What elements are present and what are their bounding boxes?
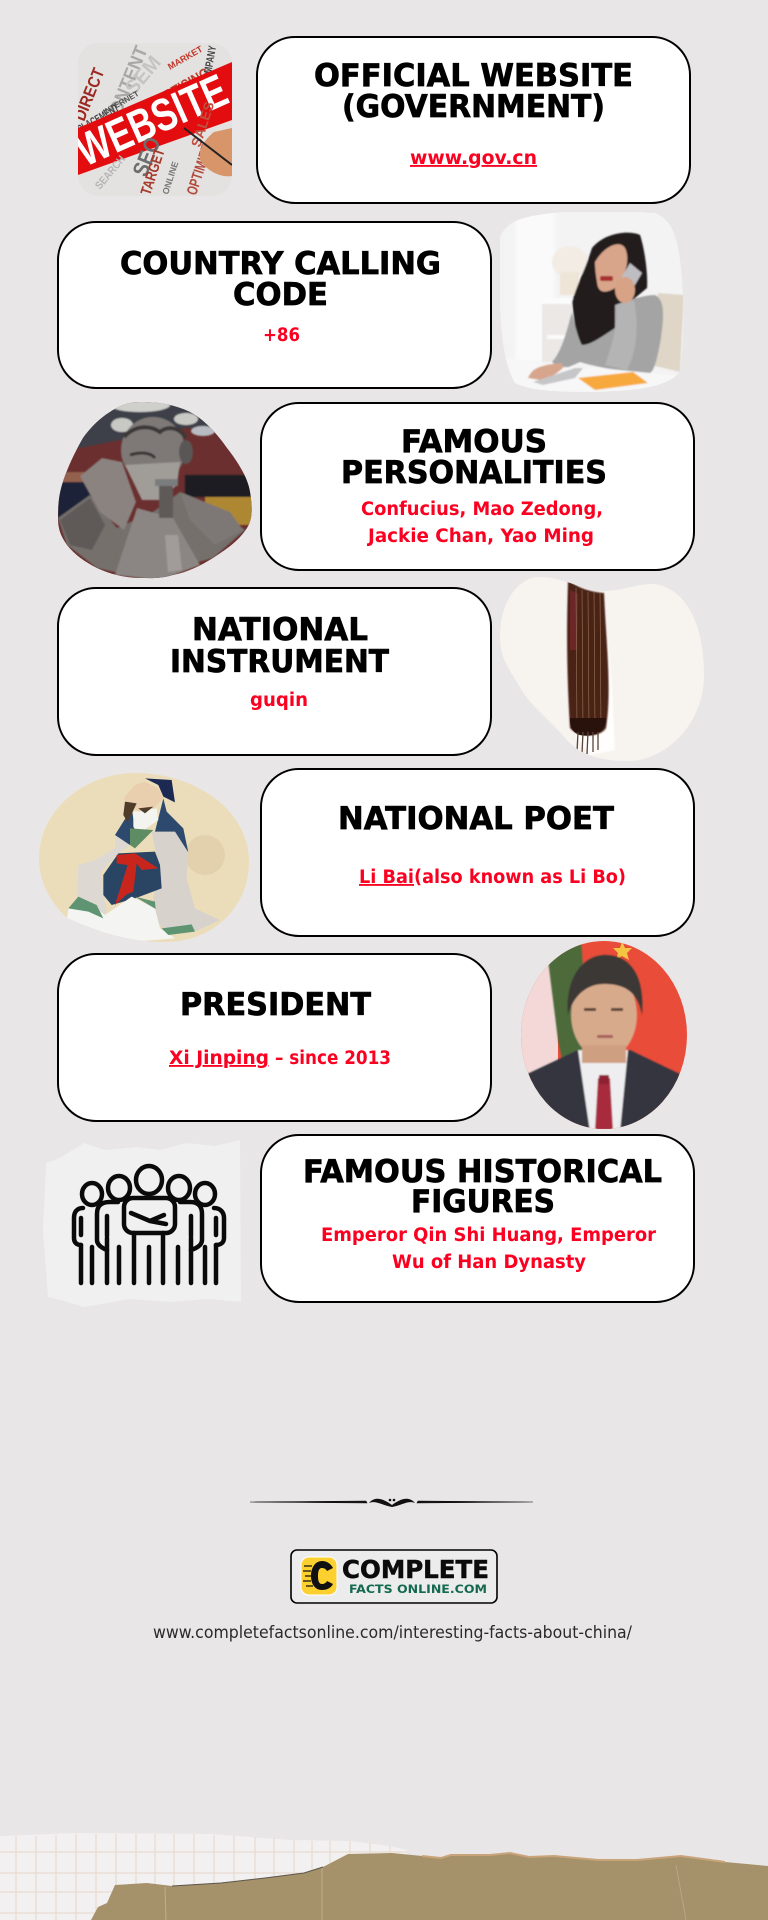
heading: FAMOUS HISTORICAL	[303, 1154, 662, 1190]
photo: woman on phone	[500, 212, 684, 392]
heading: NATIONAL POET	[338, 801, 614, 837]
card	[261, 403, 694, 570]
torn graph paper	[0, 1833, 407, 1920]
heading	[303, 1154, 662, 1220]
icon: website word cloud photo: SEARCH	[93, 154, 128, 192]
icon: website word cloud photo: SEO	[127, 133, 166, 180]
icon: website word cloud photo: OPTIMIZE	[184, 143, 216, 197]
value text: guqin	[250, 690, 308, 711]
value text: – since 2013	[275, 1048, 391, 1069]
icon: yellow C badge	[301, 1557, 337, 1595]
logo: Complete Facts Online	[291, 1550, 497, 1603]
value text: Xi Jinping	[169, 1048, 269, 1069]
icon: people group on torn paper	[43, 1140, 241, 1307]
icon: website word cloud photo: PLACEMENT	[76, 102, 121, 136]
names text: Confucius, Mao Zedong,	[361, 499, 603, 520]
lower white	[67, 897, 175, 942]
card	[261, 1135, 694, 1302]
icon: website word cloud photo: INTERNET	[102, 89, 141, 117]
torn cardboard	[91, 1853, 768, 1920]
right sleeve	[152, 832, 220, 932]
heading: COUNTRY CALLING	[120, 246, 441, 282]
heading: FAMOUS	[401, 424, 547, 460]
shelf	[542, 298, 572, 362]
icon: website word cloud photo: CONTENT	[101, 43, 153, 130]
panel: official website	[68, 37, 690, 203]
value text: Li Bai	[359, 867, 414, 888]
panel: president	[58, 940, 690, 1132]
icon: website word cloud photo: TARGET	[138, 146, 169, 197]
hand	[200, 128, 232, 176]
illustration: Li Bai	[39, 772, 251, 944]
value text: +86	[263, 325, 300, 346]
photo: guqin	[500, 577, 705, 762]
value text	[169, 1048, 391, 1069]
photo: Xi Jinping	[520, 940, 690, 1132]
logo: Complete Facts Online: COMPLETE	[342, 1555, 489, 1584]
card	[261, 769, 694, 936]
icon: website word cloud photo: MARKET	[166, 44, 205, 72]
icon: website word cloud photo: ADVERTISING	[132, 65, 213, 121]
flowers and vase	[552, 246, 588, 278]
heading: CODE	[233, 277, 328, 313]
hands	[80, 458, 136, 530]
face	[595, 244, 627, 292]
link text: www.gov.cn	[410, 148, 537, 169]
card	[58, 222, 491, 388]
card	[58, 588, 491, 755]
hair	[572, 233, 647, 358]
heading: NATIONAL	[192, 612, 368, 648]
left sleeve	[77, 835, 130, 920]
icon: website word cloud photo	[78, 44, 232, 194]
card	[257, 37, 690, 203]
heading: (GOVERNMENT)	[342, 89, 605, 125]
names text	[361, 499, 603, 547]
heading	[120, 246, 441, 313]
head	[123, 782, 163, 812]
photo: Confucius statue	[58, 398, 252, 580]
icon: website word cloud photo: ONLINE	[160, 160, 180, 196]
names text: Wu of Han Dynasty	[392, 1252, 586, 1273]
chair	[654, 292, 684, 372]
heading: OFFICIAL WEBSITE	[314, 58, 633, 94]
panel: famous personalities	[58, 398, 694, 580]
names text	[321, 1225, 657, 1273]
heading: PRESIDENT	[180, 987, 371, 1023]
heading: FIGURES	[411, 1184, 555, 1220]
navy skirt	[103, 852, 162, 905]
icon: website word cloud photo: SALES	[188, 100, 217, 149]
logo: Complete Facts Online: FACTS ONLINE.COM	[349, 1582, 487, 1596]
heading: INSTRUMENT	[170, 644, 389, 680]
navy collar	[115, 808, 135, 845]
source url: www.completefactsonline.com/interesting-facts-about-china/	[153, 1623, 632, 1642]
ornamental divider	[250, 1499, 533, 1507]
heading	[314, 58, 633, 125]
icon: website word cloud photo: WEBSITE	[68, 64, 235, 176]
suit	[528, 1049, 680, 1128]
heading: PERSONALITIES	[341, 455, 607, 491]
face	[570, 983, 638, 1048]
panel: national instrument	[58, 577, 705, 762]
head	[120, 416, 184, 469]
icon: website word cloud photo: COMPANY	[200, 44, 219, 86]
value text: (also known as Li Bo)	[414, 867, 626, 888]
body	[58, 492, 245, 578]
icon: website word cloud photo: DIRECT	[70, 65, 109, 123]
panel: national poet	[39, 769, 694, 944]
names text: Emperor Qin Shi Huang, Emperor	[321, 1225, 657, 1246]
phone	[621, 262, 643, 286]
card	[58, 954, 491, 1121]
panel: famous historical figures	[43, 1135, 694, 1307]
desk	[528, 366, 650, 391]
sweater	[552, 295, 663, 373]
heading	[341, 424, 607, 491]
icon: website word cloud photo: SEM	[121, 52, 166, 99]
red sash	[115, 853, 158, 905]
names text: Jackie Chan, Yao Ming	[366, 526, 594, 547]
red band	[78, 62, 232, 175]
heading	[170, 612, 389, 680]
panel: country calling code	[58, 212, 684, 392]
